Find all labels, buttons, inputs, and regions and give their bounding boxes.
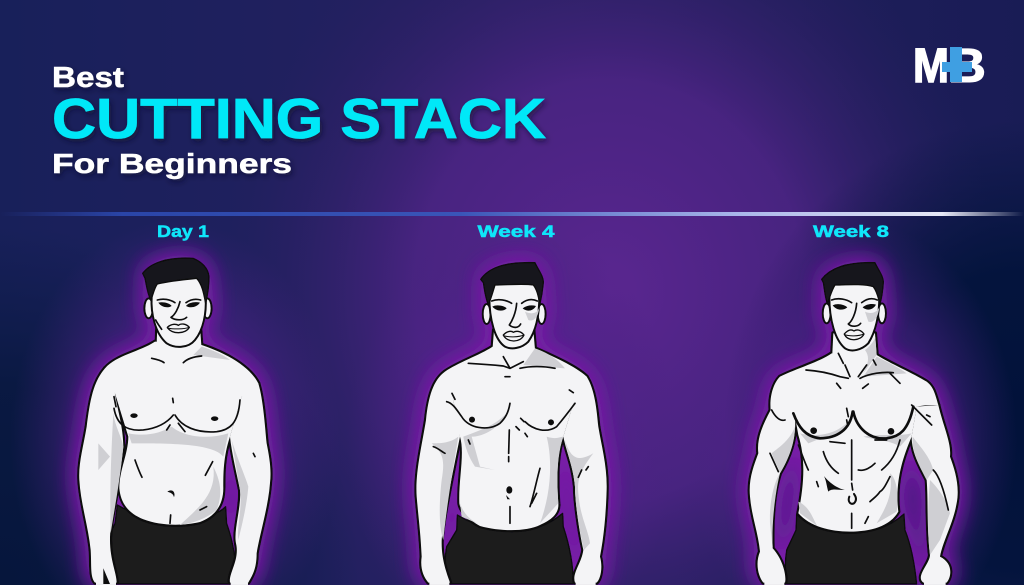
timeline divider — [0, 212, 1024, 216]
ears — [823, 303, 831, 323]
torso shading — [128, 347, 230, 525]
title line: For Beginners: For Beginners — [52, 148, 292, 179]
facial features — [492, 300, 537, 327]
title line: Best: Best — [52, 62, 124, 94]
logo: M+B — [913, 40, 986, 93]
ears — [144, 298, 153, 318]
logo: M+B: B — [948, 40, 986, 93]
body outline — [416, 330, 607, 583]
body fill — [750, 333, 958, 585]
arm shading — [432, 437, 593, 550]
label: Week 8: Week 8 — [813, 222, 889, 241]
arm shading — [770, 427, 950, 555]
face — [829, 275, 879, 350]
figure: Day 1 body — [79, 258, 271, 585]
pants — [109, 505, 237, 584]
arm shading — [98, 413, 248, 540]
title — [52, 62, 546, 179]
pants — [785, 514, 917, 584]
label: Day 1: Day 1 — [157, 222, 209, 241]
body fill — [416, 330, 607, 585]
facial features — [832, 299, 877, 326]
pants — [445, 513, 573, 584]
face — [489, 275, 539, 348]
chest and abdomen lines — [433, 363, 588, 523]
body outline — [750, 333, 958, 583]
neck lines — [503, 357, 523, 368]
hair — [143, 258, 209, 303]
facial features — [156, 299, 201, 329]
hair — [481, 263, 543, 305]
body outline — [79, 327, 271, 583]
figure: Week 8 body — [750, 263, 958, 585]
title line: Cutting Stack: CUTTING STACK — [52, 87, 546, 151]
label: Week 4: Week 4 — [478, 222, 555, 241]
face — [152, 273, 206, 347]
chest and abdomen lines — [793, 407, 913, 438]
arm lines — [770, 410, 948, 510]
ears — [483, 304, 491, 324]
figure: Week 4 body — [416, 263, 607, 585]
hair — [822, 263, 883, 304]
torso shading — [460, 348, 565, 524]
body fill — [79, 327, 271, 585]
logo: M+B: M — [913, 40, 949, 93]
torso shading — [798, 337, 912, 526]
chest and belly lines — [114, 356, 255, 523]
